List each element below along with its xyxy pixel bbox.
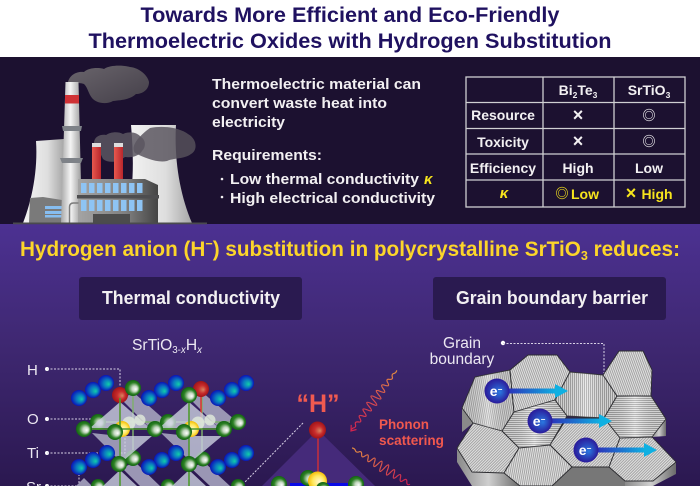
- electron arrow 2: [528, 408, 612, 434]
- panel: hydrogen substitution background: [0, 224, 700, 486]
- electron arrow 3: [574, 438, 657, 462]
- electron arrow 3: −: [587, 444, 592, 453]
- text block: intro: [212, 76, 421, 131]
- row labels: Resource: [471, 107, 535, 123]
- table: material comparison: ◎: [642, 134, 656, 149]
- efficient row: [555, 183, 673, 203]
- main chimney: [61, 82, 82, 223]
- heading: hydrogen anion: 3: [581, 248, 588, 263]
- label: phonon scattering: [379, 417, 444, 448]
- cooling tower: right: [126, 125, 192, 223]
- label: grain boundary: Grain: [443, 335, 481, 352]
- efficient row: Low: [571, 186, 599, 202]
- label: grain boundary: [430, 335, 604, 374]
- text block: intro: electricity: [212, 114, 286, 131]
- front oxygen atoms: [76, 387, 232, 472]
- efficient row: ◎: [555, 186, 569, 201]
- left low building: [29, 197, 62, 223]
- formula label: SrTiO: [132, 337, 173, 354]
- table: material comparison: 3: [666, 90, 671, 100]
- diagram: hydrogen site close-up: [262, 422, 375, 486]
- blue strontium atoms: [71, 375, 254, 475]
- electron arrow 2: −: [541, 415, 546, 424]
- electron arrow 1: −: [498, 385, 503, 394]
- title: [88, 3, 612, 53]
- table header: 3: [593, 90, 598, 100]
- diagram: polycrystalline grains: [457, 351, 676, 486]
- title: Towards More Efficient and Eco-Friendly: [140, 3, 560, 27]
- back bonds: [98, 388, 238, 459]
- text block: intro: Thermoelectric material can: [212, 76, 421, 93]
- grain shading: [462, 370, 666, 448]
- windows: [81, 183, 142, 211]
- table: material comparison: High: [562, 160, 594, 176]
- smoke: right cloud: [134, 127, 196, 161]
- legend: atom labels: O: [27, 411, 39, 428]
- illustration: power plant: [13, 66, 207, 224]
- table: material comparison: SrTiO: [628, 82, 666, 98]
- heading: hydrogen anion: reduces:: [588, 237, 680, 261]
- title: Thermoelectric Oxides with Hydrogen Substitution: [88, 29, 612, 53]
- text block: requirements: [212, 147, 436, 207]
- table: material comparison: ◎: [642, 108, 656, 123]
- text block: requirements: Low thermal conductivity: [230, 171, 420, 188]
- text block: requirements: High electrical conductivity: [230, 190, 436, 207]
- smoke: stack cloud: [94, 132, 145, 162]
- wave: upper phonon: [347, 367, 401, 434]
- formula label: 3-x: [172, 345, 186, 356]
- electron arrow 1: e: [490, 383, 498, 399]
- table: material comparison: [466, 77, 685, 207]
- washed-out atoms behind faces: [122, 414, 216, 430]
- titanium atoms: [114, 421, 130, 437]
- panel: thermal conductivity label: [79, 277, 302, 320]
- electron arrow 2: e: [533, 413, 541, 429]
- table: material comparison: Low: [635, 160, 663, 176]
- legend: atom labels: H: [27, 362, 38, 379]
- label: grain boundary: boundary: [430, 351, 495, 368]
- translucent front faces: [90, 402, 222, 486]
- table: material comparison: Efficiency: [470, 160, 536, 176]
- grain faces: [457, 351, 676, 486]
- chart: SrTiO3 crystal structure: [71, 375, 254, 486]
- panel: thermal conductivity label: Thermal conductivity: [102, 288, 280, 308]
- table: material comparison: ×: [573, 131, 583, 151]
- factory building: [78, 179, 158, 223]
- legend: atom labels: [26, 362, 125, 486]
- text block: requirements: κ: [424, 171, 434, 188]
- label: phonon scattering: scattering: [379, 433, 444, 448]
- text block: requirements: Requirements:: [212, 147, 322, 164]
- label: H: “H”: [296, 390, 340, 418]
- smoke: main chimney cloud: [68, 66, 149, 103]
- table header: Te: [577, 82, 593, 98]
- back octahedra faces: [76, 392, 235, 486]
- heading: hydrogen anion: Hydrogen anion (H: [20, 237, 212, 261]
- panel: grain boundary label: Grain boundary barrier: [456, 288, 648, 308]
- table header: Bi: [559, 82, 573, 98]
- panel: grain boundary label: [433, 277, 666, 320]
- efficient row: High: [641, 186, 673, 202]
- front bonds: [84, 398, 224, 486]
- zoom guide: [245, 423, 303, 482]
- red stacks: [92, 143, 101, 180]
- formula label: H: [186, 337, 197, 354]
- table: material comparison: Toxicity: [477, 134, 529, 150]
- electron arrow 3: e: [579, 442, 587, 458]
- ground: [13, 222, 207, 224]
- cooling tower: left: [23, 139, 64, 223]
- red hydrogen atoms: [120, 389, 201, 428]
- grain side walls: [462, 408, 473, 432]
- table: material comparison: κ: [500, 185, 510, 202]
- wave: lower phonon: [349, 444, 413, 486]
- pipe: [70, 203, 78, 223]
- heading: hydrogen anion: −: [205, 236, 213, 251]
- label: phonon scattering: Phonon: [379, 417, 429, 432]
- legend: atom labels: Ti: [27, 445, 39, 462]
- back oxygen atoms: [90, 380, 246, 486]
- efficient row: ×: [626, 183, 636, 203]
- electron arrow 1: [484, 378, 568, 404]
- formula label: x: [196, 345, 203, 356]
- panel: thermoelectric background: [0, 57, 700, 225]
- table header: 2: [573, 90, 578, 100]
- text block: intro: convert waste heat into: [212, 95, 387, 112]
- heading: hydrogen anion: ) substitution in polycrystalline SrTiO: [213, 237, 581, 261]
- row marks: ×: [573, 105, 583, 125]
